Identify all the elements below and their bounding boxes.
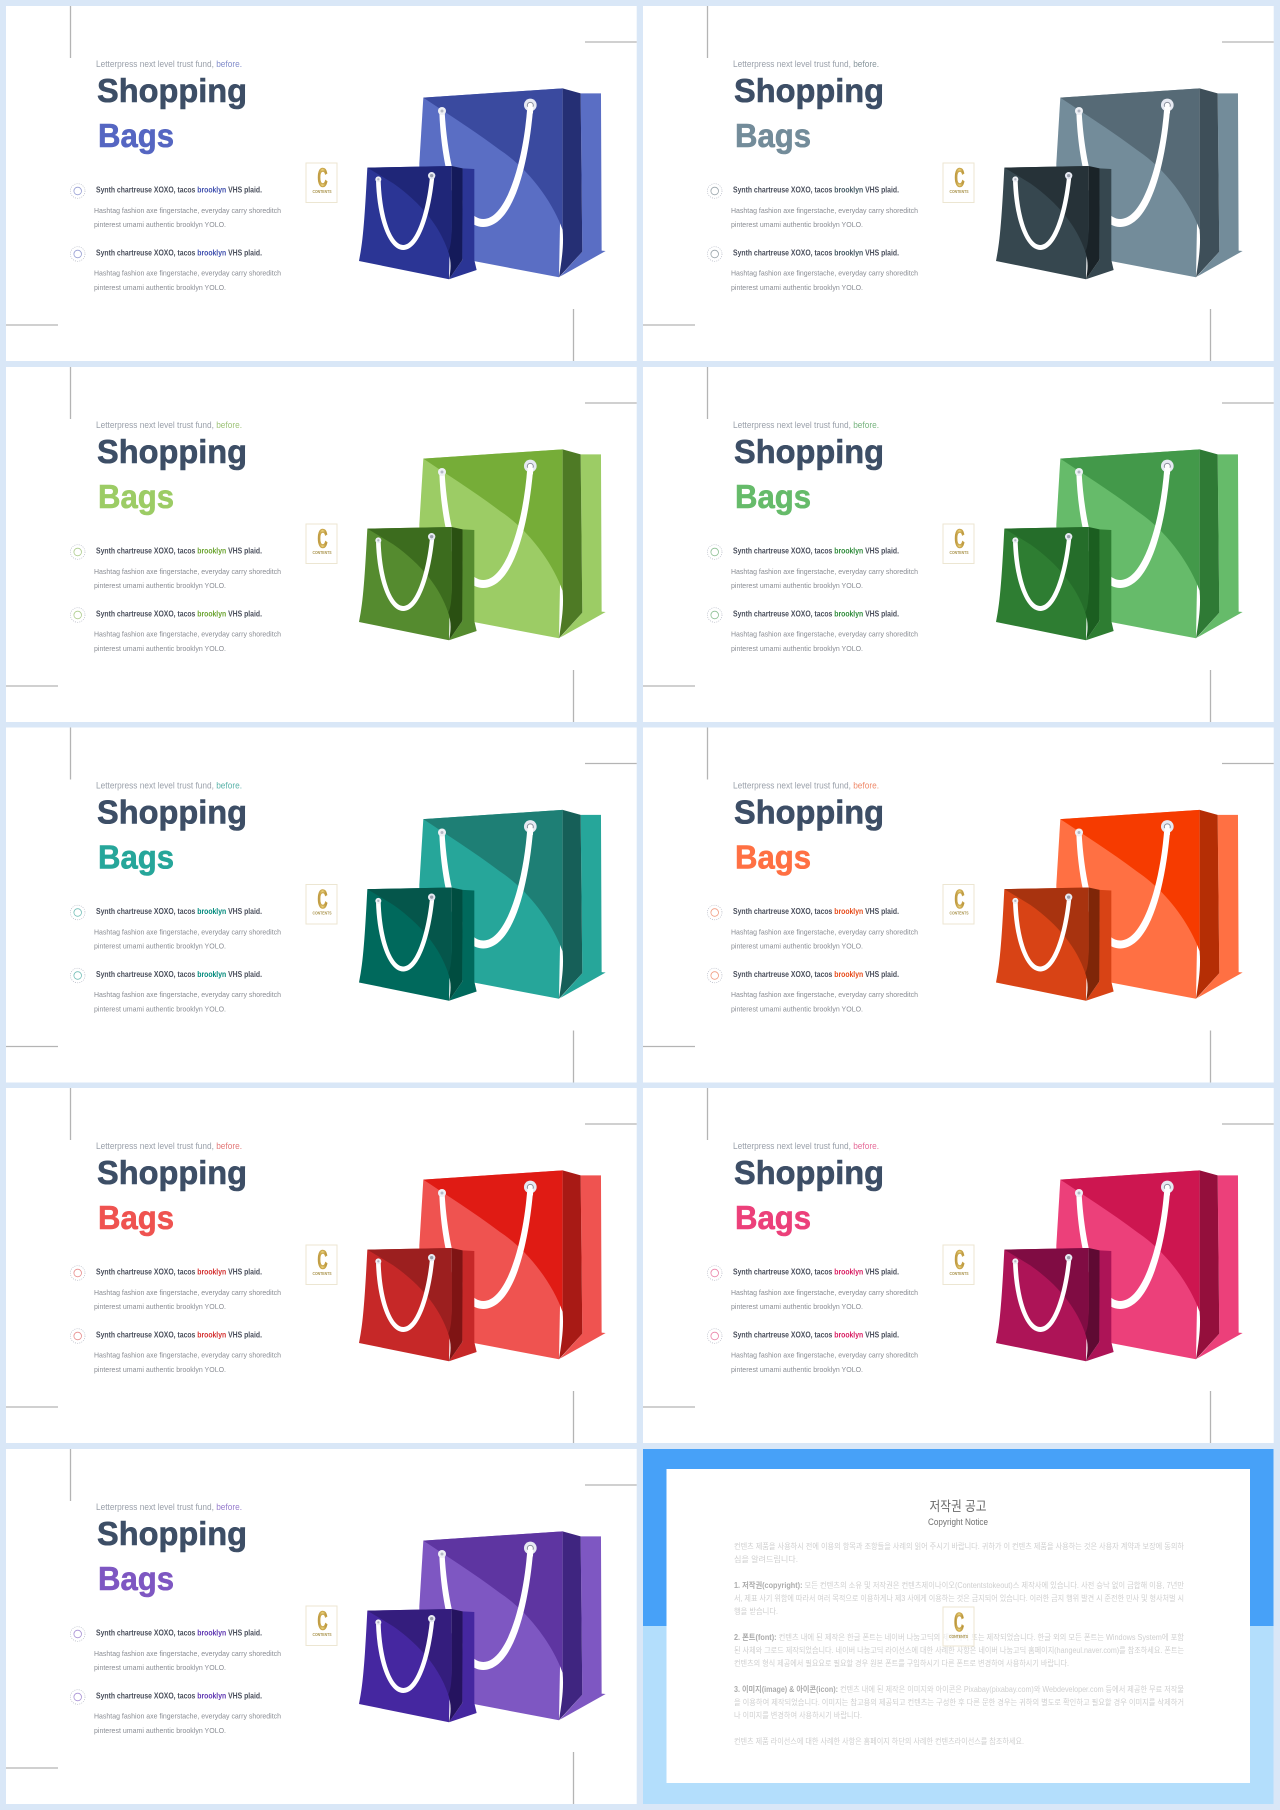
text block two: Synth chartreuse XOXO, tacos brooklyn VHS plaid. <box>733 248 899 258</box>
icon: target one <box>707 184 722 198</box>
icon: target two <box>707 608 722 622</box>
text block one: Hashtag fashion axe fingerstache, everyday carry shoreditch <box>94 928 281 936</box>
heading: Shopping: Shopping <box>734 1154 884 1191</box>
logo watermark: C <box>318 884 328 914</box>
icon: target two <box>707 1329 722 1343</box>
panel: purple shopping bags <box>6 1449 637 1804</box>
notice section three: 나 이미지를 변경하여 사용하시기 바랍니다. <box>734 1710 862 1720</box>
heading: Shopping: Shopping <box>97 72 247 109</box>
logo watermark: C <box>318 1244 328 1274</box>
illustration: shopping bags <box>359 1170 606 1361</box>
heading: Bags: Bags <box>98 1560 174 1597</box>
heading: Shopping: Shopping <box>97 794 247 830</box>
panel: light green shopping bags <box>6 367 637 722</box>
notice section one: 서, 제표 사기 위함에 따라서 여러 목적으로 이용하게나 제3 사에게 이용하는 것은 금지되어 있습니다. 이러한 금지 행위 발견 시 준전한 민사 및 형사처벌 시 <box>734 1593 1184 1603</box>
icon: target one <box>707 545 722 559</box>
icon: target two <box>70 608 85 622</box>
notice section three: 을 이용하여 제작되었습니다. 이미지는 참고용의 제공되고 컨텐츠는 구성한 후 다른 문한 경우는 귀하의 별도로 확인하고 필요할 경우 이미지를 삭제하거 <box>734 1697 1184 1707</box>
logo watermark: C <box>318 162 328 192</box>
text block two: Synth chartreuse XOXO, tacos brooklyn VHS plaid. <box>733 970 899 979</box>
text block one: Synth chartreuse XOXO, tacos brooklyn VHS plaid. <box>733 907 899 916</box>
logo watermark <box>306 162 337 202</box>
text block one: Synth chartreuse XOXO, tacos brooklyn VHS plaid. <box>96 547 262 556</box>
illustration: shopping bags <box>359 1531 606 1722</box>
notice intro: 컨텐츠 제품을 사용하시 전에 이용의 항목과 조항들을 사례의 읽어 주시기 바랍니다. 귀하가 이 컨텐츠 제품을 사용하는 것은 사용자 계약과 보장에 동의하 <box>734 1541 1185 1551</box>
logo watermark <box>306 524 337 564</box>
notice section one: 행을 받습니다. <box>734 1606 778 1616</box>
text block two: pinterest umami authentic brooklyn YOLO. <box>731 1004 863 1014</box>
notice section two: 된 사체와 그로드 제작되었습니다. 네이버 나눔고딕 라이선스에 대한 사례한 사항은 네이버 나눔고딕 홈페이지(hangeul.naver.com)를 참조하세요. 폰트는 <box>734 1645 1184 1655</box>
panel: blue shopping bags <box>6 6 637 361</box>
text block one <box>731 547 918 590</box>
logo watermark <box>943 162 974 202</box>
subtitle: Letterpress next level trust fund, before. <box>96 59 242 70</box>
icon: target two <box>707 968 722 983</box>
heading: Bags: Bags <box>735 117 811 154</box>
notice section two: 컨텐츠의 형식 제공에서 필요요로 필요할 경우 원본 폰트를 구입하시기 다른 폰트로 변경하여 사용하시기 바랍니다. <box>734 1658 1069 1668</box>
icon: target one <box>70 545 85 559</box>
text block two: Hashtag fashion axe fingerstache, everyday carry shoreditch <box>94 630 281 639</box>
logo watermark <box>943 524 974 564</box>
panel: copyright notice <box>643 1449 1274 1804</box>
text block two: Hashtag fashion axe fingerstache, everyday carry shoreditch <box>94 1712 281 1721</box>
text block two: Synth chartreuse XOXO, tacos brooklyn VHS plaid. <box>733 1330 899 1340</box>
text block one <box>94 1268 281 1311</box>
text block one: pinterest umami authentic brooklyn YOLO. <box>94 1302 226 1311</box>
text block one: pinterest umami authentic brooklyn YOLO. <box>94 220 226 229</box>
text block one: pinterest umami authentic brooklyn YOLO. <box>94 581 226 590</box>
text block two: Hashtag fashion axe fingerstache, everyday carry shoreditch <box>94 269 281 278</box>
text block two: Synth chartreuse XOXO, tacos brooklyn VHS plaid. <box>96 1692 262 1700</box>
text block one: pinterest umami authentic brooklyn YOLO. <box>731 220 863 229</box>
heading: Shopping: Shopping <box>734 433 884 470</box>
subtitle: Letterpress next level trust fund, before. <box>96 780 242 792</box>
heading: Bags: Bags <box>98 478 174 515</box>
text block two: pinterest umami authentic brooklyn YOLO. <box>94 644 226 653</box>
heading: Shopping: Shopping <box>97 1154 247 1191</box>
text block one: Synth chartreuse XOXO, tacos brooklyn VHS plaid. <box>96 907 262 916</box>
text block one: Hashtag fashion axe fingerstache, everyday carry shoreditch <box>94 206 281 215</box>
text block one <box>731 1268 918 1311</box>
icon: target two <box>70 1329 85 1343</box>
logo watermark: C <box>954 1607 964 1637</box>
logo watermark <box>943 884 974 924</box>
text block one: Hashtag fashion axe fingerstache, everyday carry shoreditch <box>731 928 918 936</box>
text block one: Synth chartreuse XOXO, tacos brooklyn VHS plaid. <box>96 1268 262 1277</box>
text block two <box>94 610 281 653</box>
icon: target one <box>70 184 85 198</box>
text block one: Synth chartreuse XOXO, tacos brooklyn VHS plaid. <box>733 186 899 195</box>
logo watermark: C <box>954 524 965 554</box>
notice section three <box>734 1684 1184 1720</box>
icon: target one <box>707 1266 722 1280</box>
text block two: Hashtag fashion axe fingerstache, everyday carry shoreditch <box>731 269 918 278</box>
heading: Shopping: Shopping <box>97 1515 247 1552</box>
text block two: Synth chartreuse XOXO, tacos brooklyn VHS plaid. <box>96 970 262 979</box>
text block two: Hashtag fashion axe fingerstache, everyday carry shoreditch <box>94 990 281 999</box>
text block one: Hashtag fashion axe fingerstache, everyday carry shoreditch <box>731 1288 918 1297</box>
text block two: Hashtag fashion axe fingerstache, everyday carry shoreditch <box>731 630 918 639</box>
text block one <box>94 1629 281 1672</box>
subtitle: Letterpress next level trust fund, before. <box>733 420 879 431</box>
text block two <box>94 1692 281 1735</box>
text block two <box>731 970 918 1014</box>
text block two: Hashtag fashion axe fingerstache, everyday carry shoreditch <box>731 990 918 999</box>
logo watermark <box>943 1607 974 1646</box>
heading: Shopping: Shopping <box>97 433 247 470</box>
logo watermark: C <box>954 1244 965 1274</box>
illustration: shopping bags <box>996 449 1243 640</box>
logo watermark: CONTENTS <box>312 189 332 194</box>
logo watermark: CONTENTS <box>950 189 969 194</box>
text block two: pinterest umami authentic brooklyn YOLO. <box>731 644 863 653</box>
icon: target two <box>707 247 722 261</box>
text block one: Synth chartreuse XOXO, tacos brooklyn VHS plaid. <box>96 186 262 195</box>
notice subtitle: Copyright Notice <box>928 1517 988 1527</box>
notice title: 저작권 공고 <box>930 1499 986 1514</box>
text block one: Hashtag fashion axe fingerstache, everyday carry shoreditch <box>94 1288 281 1297</box>
heading: Shopping: Shopping <box>734 794 884 830</box>
text block two: pinterest umami authentic brooklyn YOLO. <box>731 283 863 292</box>
text block two: pinterest umami authentic brooklyn YOLO. <box>94 283 226 292</box>
text block two <box>94 248 281 292</box>
icon: target one <box>70 1266 85 1280</box>
text block one <box>94 547 281 590</box>
subtitle: Letterpress next level trust fund, before. <box>96 420 242 431</box>
logo watermark: CONTENTS <box>950 910 969 916</box>
subtitle: Letterpress next level trust fund, before. <box>96 1502 242 1513</box>
notice footer: 컨텐츠 제품 라이선스에 대한 사례한 사항은 홈페이지 하단의 사례한 컨텐츠라이선스를 참조하세요. <box>734 1736 1024 1746</box>
text block two <box>94 970 281 1014</box>
text block one: Synth chartreuse XOXO, tacos brooklyn VHS plaid. <box>733 1268 899 1277</box>
text block one: Synth chartreuse XOXO, tacos brooklyn VHS plaid. <box>733 547 899 556</box>
text block one: pinterest umami authentic brooklyn YOLO. <box>94 942 226 950</box>
logo watermark <box>306 1606 337 1646</box>
logo watermark <box>306 1244 337 1284</box>
text block one: Hashtag fashion axe fingerstache, everyday carry shoreditch <box>94 1649 281 1658</box>
notice section one <box>734 1580 1185 1616</box>
text block one: Hashtag fashion axe fingerstache, everyday carry shoreditch <box>731 567 918 576</box>
text block one: pinterest umami authentic brooklyn YOLO. <box>94 1663 226 1672</box>
illustration: shopping bags <box>359 88 606 279</box>
logo watermark: C <box>954 884 965 914</box>
illustration: shopping bags <box>996 1170 1243 1361</box>
text block two: Synth chartreuse XOXO, tacos brooklyn VHS plaid. <box>96 610 262 618</box>
logo watermark: CONTENTS <box>312 910 332 916</box>
logo watermark: CONTENTS <box>312 1271 332 1276</box>
icon: target one <box>70 1627 85 1641</box>
text block one <box>94 907 281 950</box>
panel: teal shopping bags <box>6 728 637 1082</box>
notice section one: 1. 저작권(copyright): 모든 컨텐츠의 소유 및 저작권은 컨텐츠제이나이오(Contentstokeout)스 제작사에 있습니다. 사전 승낙 없이 금합해 이용, 7년만 <box>734 1580 1185 1590</box>
text block two <box>731 610 918 653</box>
text block two: pinterest umami authentic brooklyn YOLO. <box>94 1726 226 1735</box>
logo watermark: CONTENTS <box>312 550 332 555</box>
text block one: Synth chartreuse XOXO, tacos brooklyn VHS plaid. <box>96 1629 262 1638</box>
logo watermark: CONTENTS <box>950 550 969 555</box>
text block two <box>731 248 918 292</box>
notice section two <box>734 1632 1185 1668</box>
heading: Bags: Bags <box>98 838 174 876</box>
panel: pink shopping bags <box>643 1088 1274 1443</box>
subtitle: Letterpress next level trust fund, before. <box>96 1141 242 1152</box>
heading: Bags: Bags <box>735 838 811 876</box>
text block one: Hashtag fashion axe fingerstache, everyday carry shoreditch <box>731 206 918 215</box>
text block two: pinterest umami authentic brooklyn YOLO. <box>731 1365 863 1374</box>
notice section two: 2. 폰트(font): 컨텐츠 내에 된 제작은 한글 폰트는 네이버 나눔고딕의 제작되며 또는 제작되었습니다. 한글 외의 모든 폰트는 Windows System에 포함 <box>734 1632 1185 1642</box>
text block one: pinterest umami authentic brooklyn YOLO. <box>731 1302 863 1311</box>
logo watermark: CONTENTS <box>312 1632 332 1637</box>
illustration: shopping bags <box>996 88 1243 279</box>
subtitle: Letterpress next level trust fund, before. <box>733 1141 879 1152</box>
icon: target two <box>70 1690 85 1704</box>
icon: target two <box>70 968 85 983</box>
panel: green shopping bags <box>643 367 1274 722</box>
logo watermark: C <box>318 524 328 554</box>
subtitle: Letterpress next level trust fund, before. <box>733 780 879 792</box>
text block two <box>731 1330 918 1374</box>
heading: Shopping: Shopping <box>734 72 884 109</box>
notice intro <box>734 1541 1185 1564</box>
heading: Bags: Bags <box>98 1199 174 1236</box>
icon: target one <box>707 905 722 920</box>
logo watermark <box>306 884 337 924</box>
text block one: Hashtag fashion axe fingerstache, everyday carry shoreditch <box>94 567 281 576</box>
text block one: pinterest umami authentic brooklyn YOLO. <box>731 581 863 590</box>
text block two: pinterest umami authentic brooklyn YOLO. <box>94 1365 226 1374</box>
text block two: Hashtag fashion axe fingerstache, everyday carry shoreditch <box>94 1351 281 1360</box>
text block two <box>94 1330 281 1374</box>
subtitle: Letterpress next level trust fund, before. <box>733 59 879 70</box>
logo watermark: C <box>318 1606 328 1636</box>
text block two: pinterest umami authentic brooklyn YOLO. <box>94 1004 226 1014</box>
heading: Bags: Bags <box>735 1199 811 1236</box>
notice intro: 심을 알려드립니다. <box>734 1554 798 1564</box>
text block one <box>731 186 918 229</box>
heading: Bags: Bags <box>735 478 811 515</box>
icon: target one <box>70 905 85 920</box>
text block two: Synth chartreuse XOXO, tacos brooklyn VHS plaid. <box>96 248 262 258</box>
text block one <box>731 907 918 950</box>
text block two: Synth chartreuse XOXO, tacos brooklyn VHS plaid. <box>733 610 899 618</box>
logo watermark <box>943 1244 974 1284</box>
heading: Bags: Bags <box>98 117 174 154</box>
panel: slate shopping bags <box>643 6 1274 361</box>
logo watermark: CONTENTS <box>949 1634 968 1639</box>
panel: red shopping bags <box>6 1088 637 1443</box>
text block two: Synth chartreuse XOXO, tacos brooklyn VHS plaid. <box>96 1330 262 1340</box>
text block one: pinterest umami authentic brooklyn YOLO. <box>731 942 863 950</box>
notice section three: 3. 이미지(image) & 아이콘(icon): 컨텐츠 내에 된 제작은 이미지와 아이콘은 Pixabay(pixabay.com)와 Webdeveloper.com 등에서 제공한 무료 저작물 <box>734 1684 1184 1694</box>
text block one <box>94 186 281 229</box>
logo watermark: C <box>954 162 965 192</box>
illustration: shopping bags <box>359 810 606 1001</box>
icon: target two <box>70 247 85 261</box>
panel: orange shopping bags <box>643 728 1274 1082</box>
illustration: shopping bags <box>359 449 606 640</box>
illustration: shopping bags <box>996 810 1243 1001</box>
text block two: Hashtag fashion axe fingerstache, everyday carry shoreditch <box>731 1351 918 1360</box>
logo watermark: CONTENTS <box>950 1271 969 1276</box>
